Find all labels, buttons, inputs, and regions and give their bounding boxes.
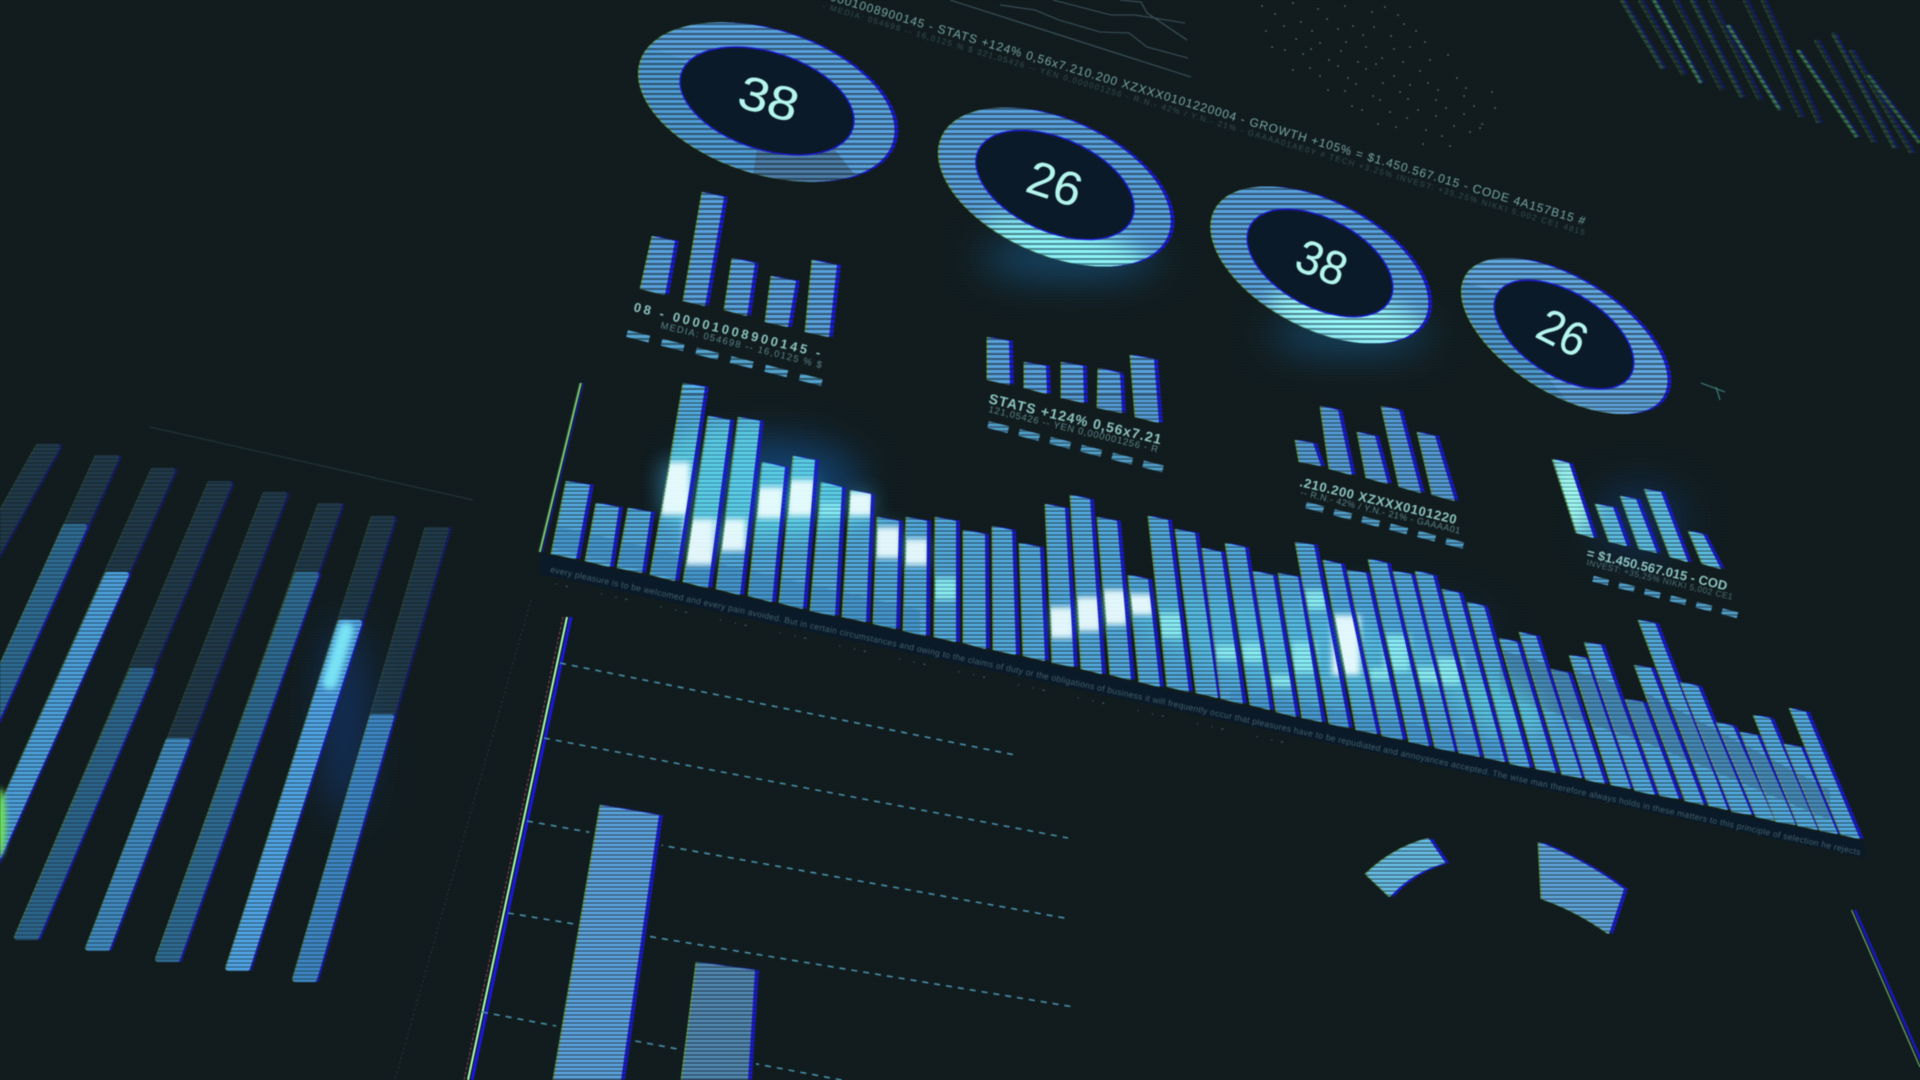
sparse caption fragments (556, 584, 1300, 746)
mini bars (1296, 406, 1455, 501)
right frame line (1852, 910, 1920, 1067)
tall bar (554, 805, 659, 1080)
lower chart axis (464, 617, 571, 1080)
cursor mark (1701, 383, 1725, 400)
mini chart group 1 (627, 192, 837, 382)
halo (554, 805, 755, 1080)
mini bars (1553, 459, 1721, 569)
white light blobs (660, 462, 1360, 675)
green glare at frame edge (0, 788, 6, 856)
lower chart grid lines (482, 663, 1074, 1080)
value: 26 (1020, 151, 1089, 218)
caption: = $1.450.567.015 - COD (1585, 545, 1729, 593)
gauge segment left (1366, 838, 1446, 897)
hole (959, 108, 1151, 262)
gauge segment right (1539, 842, 1624, 934)
sub caption: 121,05426 -- YEN 0,000001256 - R (987, 404, 1159, 456)
caption: 08 - 00001008900145 - (632, 299, 822, 360)
mini bars (641, 192, 837, 337)
sub caption: MEDIA: 054698 -- 16,0125 % $ (659, 320, 824, 371)
lighting bands inside bars (552, 420, 1830, 820)
donut gauge: 38 second (1210, 186, 1433, 344)
caption: STATS +124% 0,56x7.21 (987, 390, 1163, 447)
panel: left progress bars (0, 444, 452, 983)
hole (1476, 258, 1652, 411)
donut gauge: 38 (637, 21, 900, 183)
bright tip on progress bar (330, 630, 346, 682)
main bar chart (540, 383, 1865, 858)
mini chart group 3 (1296, 406, 1464, 546)
donut gauge: 26 (937, 106, 1176, 268)
sub caption: -- R.N.- 42% / Y.N.- 21% - GAAAA01 (1300, 487, 1461, 536)
mini bars (988, 337, 1159, 423)
caption: .210.200 XZXXX0101220 (1298, 474, 1458, 527)
bloom around bright blobs (660, 462, 1360, 675)
ring (1210, 186, 1433, 344)
ticker line secondary: - MEDIA: 054698 -- 16,0125 % $ 321,05426 -- YEN 0,000001256 - R.N.- 42% / Y.N.- 21% - GAAAA01AE0Y # TECH +3,25% INVEST: +35,25% NIKKI 5,002 CE1 4815 (821, 1, 1586, 237)
panel: top-right diagonal stripes (1622, 0, 1920, 153)
cyan light blobs (818, 503, 1462, 687)
dash row (1306, 505, 1464, 546)
ring (1460, 258, 1672, 415)
value: 38 (1289, 229, 1355, 297)
value: 26 (1529, 298, 1596, 368)
bars (552, 383, 1860, 839)
mini chart group 2 (987, 337, 1163, 469)
scatter dots top (1262, 3, 1495, 146)
dash row (627, 334, 822, 382)
sub caption: INVEST: +35,25% NIKKI 5,002 CE1 (1586, 557, 1734, 602)
hole (1230, 187, 1410, 339)
main chart axis (540, 383, 581, 552)
bright highlight (1546, 455, 1594, 535)
hole (666, 27, 868, 175)
bar tracks (0, 444, 452, 982)
ring (637, 21, 900, 183)
glow behind bright progress bar (323, 620, 367, 820)
short bar (682, 962, 755, 1080)
glow under rings (680, 240, 1685, 665)
panel: faint wave chart top (950, 0, 1191, 77)
dash row (1593, 579, 1738, 615)
ring (937, 106, 1176, 268)
baseline caption text: every pleasure is to be welcomed and every pain avoided. But in certain circumstances and owing to the claims of duty or the obligations of business it will frequently occur that pleasures have to be repudiated and annoyances accepted. The wise man therefore always holds in these matters to this principle of selection he rejects (550, 564, 1861, 857)
bar fills (0, 524, 397, 983)
donut gauge: 26 second (1460, 258, 1672, 415)
faint panel frame lines (150, 427, 531, 1080)
lower bar chart (554, 805, 755, 1080)
long data ticker text (821, 0, 1587, 237)
mini chart group 4 (1546, 455, 1738, 615)
value: 38 (733, 65, 805, 133)
dash row (988, 424, 1163, 469)
baseline shelf (540, 553, 1865, 858)
